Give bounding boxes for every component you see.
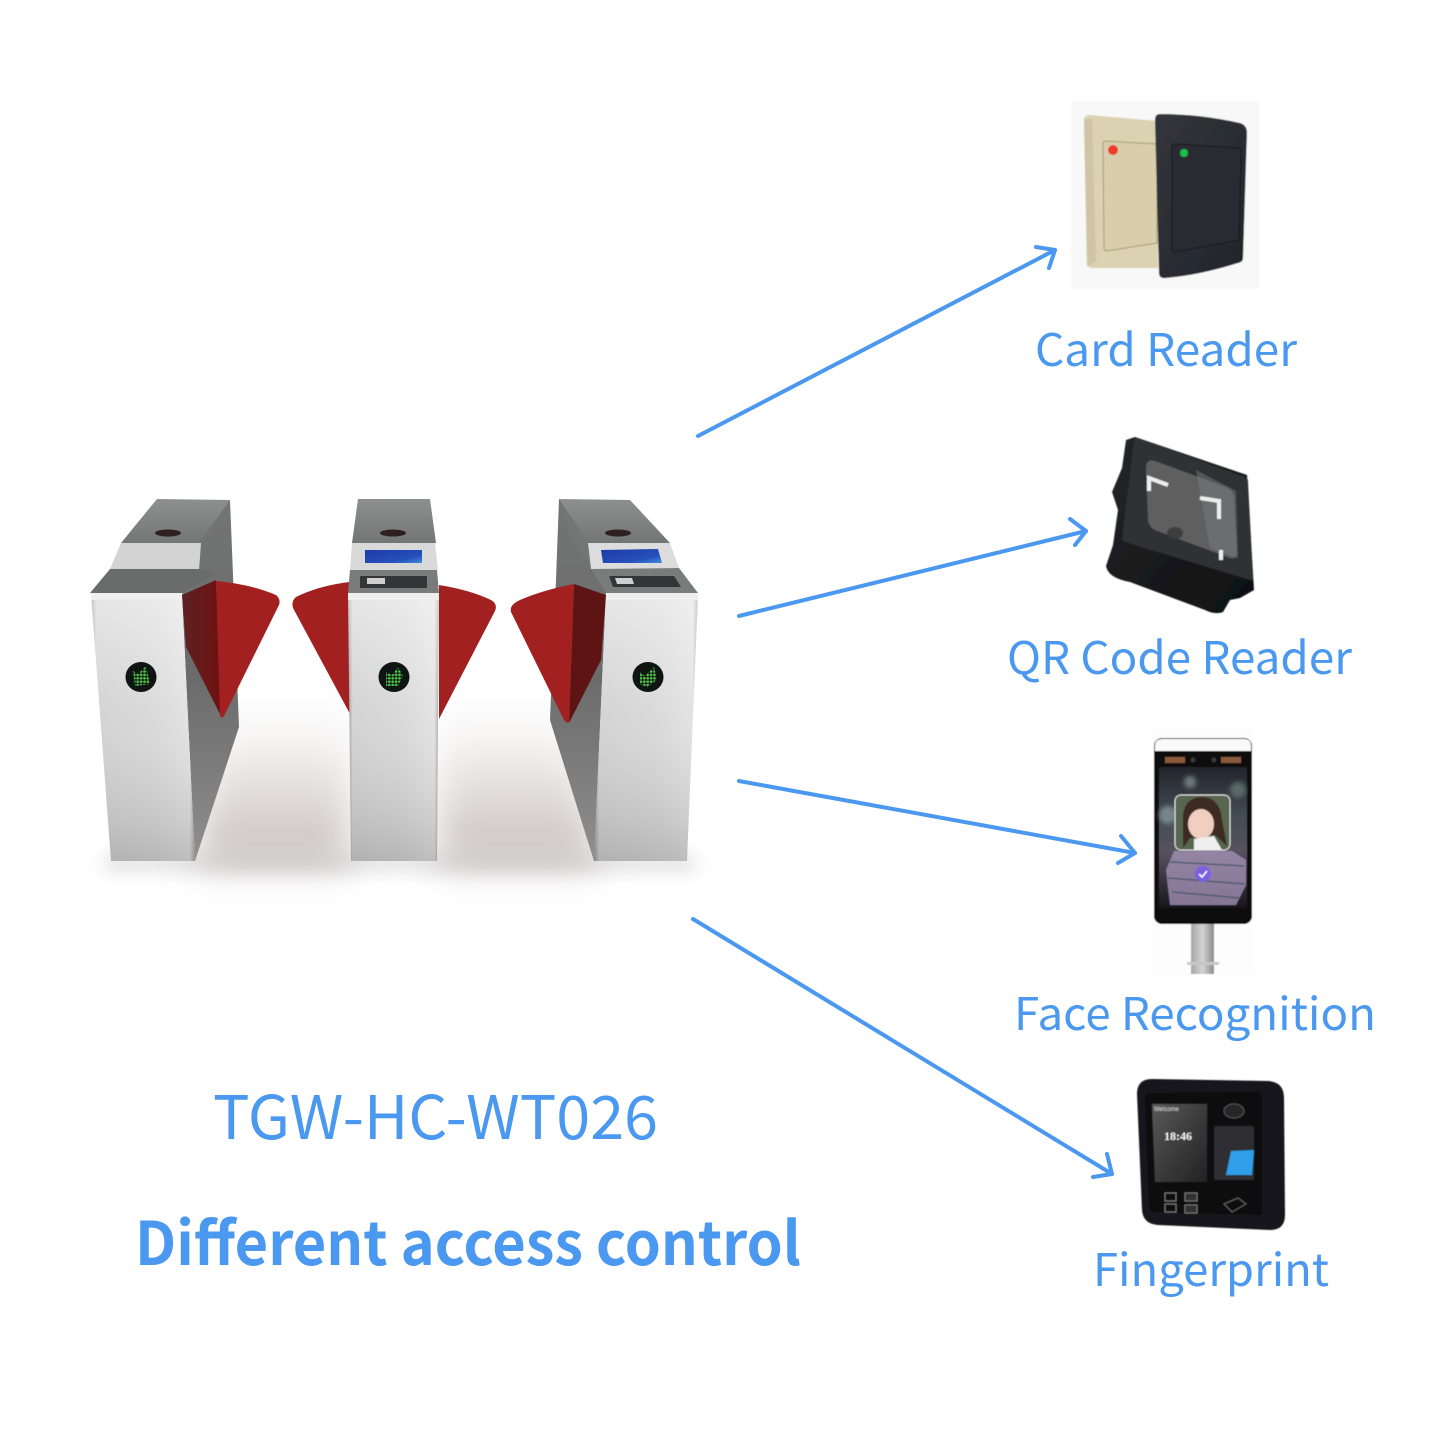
icon: fingerprint terminal — [1137, 1079, 1285, 1230]
face recognition label: Face Recognition — [1014, 978, 1376, 1043]
blurred foliage — [1159, 776, 1246, 824]
turnstile gates photo — [90, 499, 698, 870]
left gate — [90, 499, 280, 861]
arrow: to face recognition — [739, 781, 1135, 863]
icon: fingerprint terminal: Welcome — [1154, 1107, 1180, 1113]
arrow: to card reader — [698, 247, 1055, 436]
center gate — [292, 499, 496, 861]
fingerprint label: Fingerprint — [1093, 1234, 1329, 1299]
arrow: to fingerprint — [693, 919, 1112, 1177]
icon: face recognition terminal — [1152, 726, 1254, 974]
icon: QR code reader — [1106, 437, 1254, 613]
right gate — [511, 499, 698, 861]
card reader label: Card Reader — [1035, 314, 1298, 379]
icon: card readers — [1071, 101, 1259, 289]
arrow: to QR code reader — [739, 519, 1086, 616]
QR code reader label: QR Code Reader — [1007, 622, 1353, 687]
heading: different access control: Different access control — [135, 1196, 801, 1283]
model number: TGW-HC-WT026 — [213, 1070, 658, 1157]
floor shadows — [105, 680, 695, 870]
icon: fingerprint terminal: 18:46 — [1164, 1129, 1192, 1143]
